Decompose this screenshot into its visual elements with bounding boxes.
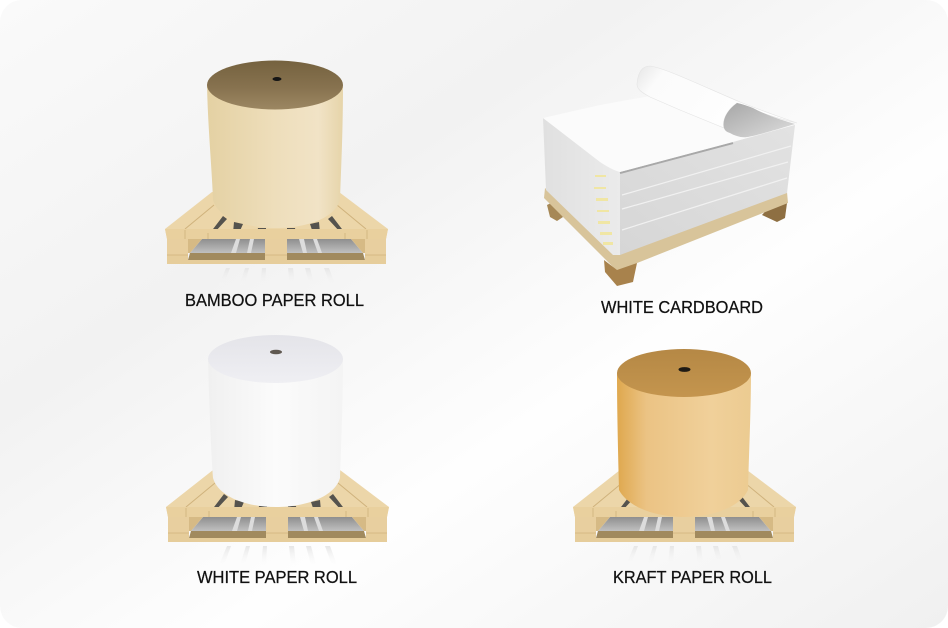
item: white cardboard [543, 66, 797, 317]
item: kraft paper roll [573, 349, 796, 587]
curled sheet underside [724, 103, 795, 137]
bamboo roll body [207, 85, 343, 228]
item: bamboo paper roll [165, 60, 388, 310]
item: white paper roll [166, 335, 389, 587]
stack: right face [620, 125, 795, 255]
pallet under white roll [166, 470, 389, 565]
stack: sheet lines [622, 146, 791, 230]
bamboo roll core hole [272, 77, 282, 81]
kraft roll top [617, 349, 751, 397]
pallet under bamboo roll [165, 192, 388, 287]
white roll body [208, 359, 343, 507]
label: white cardboard: WHITE CARDBOARD [601, 297, 763, 317]
label: white paper roll: WHITE PAPER ROLL [197, 567, 357, 587]
white roll top [208, 335, 343, 383]
stack: yellow tabs [594, 175, 613, 245]
label: kraft paper roll: KRAFT PAPER ROLL [613, 567, 772, 587]
bamboo roll top [207, 60, 343, 110]
pallet: left foot [547, 202, 563, 221]
pallet: front foot [604, 260, 637, 286]
top sheet [543, 96, 797, 172]
stack: top ply edge [620, 143, 733, 173]
kraft roll body [617, 373, 751, 517]
pallet: right foot [762, 203, 787, 222]
pallet under kraft roll [573, 470, 796, 565]
stack: left face [543, 118, 620, 255]
kraft roll core hole [678, 367, 690, 372]
pallet: deck board [544, 188, 788, 271]
label: bamboo paper roll: BAMBOO PAPER ROLL [185, 290, 364, 310]
white roll core hole [270, 350, 282, 354]
curled sheet back [637, 66, 797, 128]
